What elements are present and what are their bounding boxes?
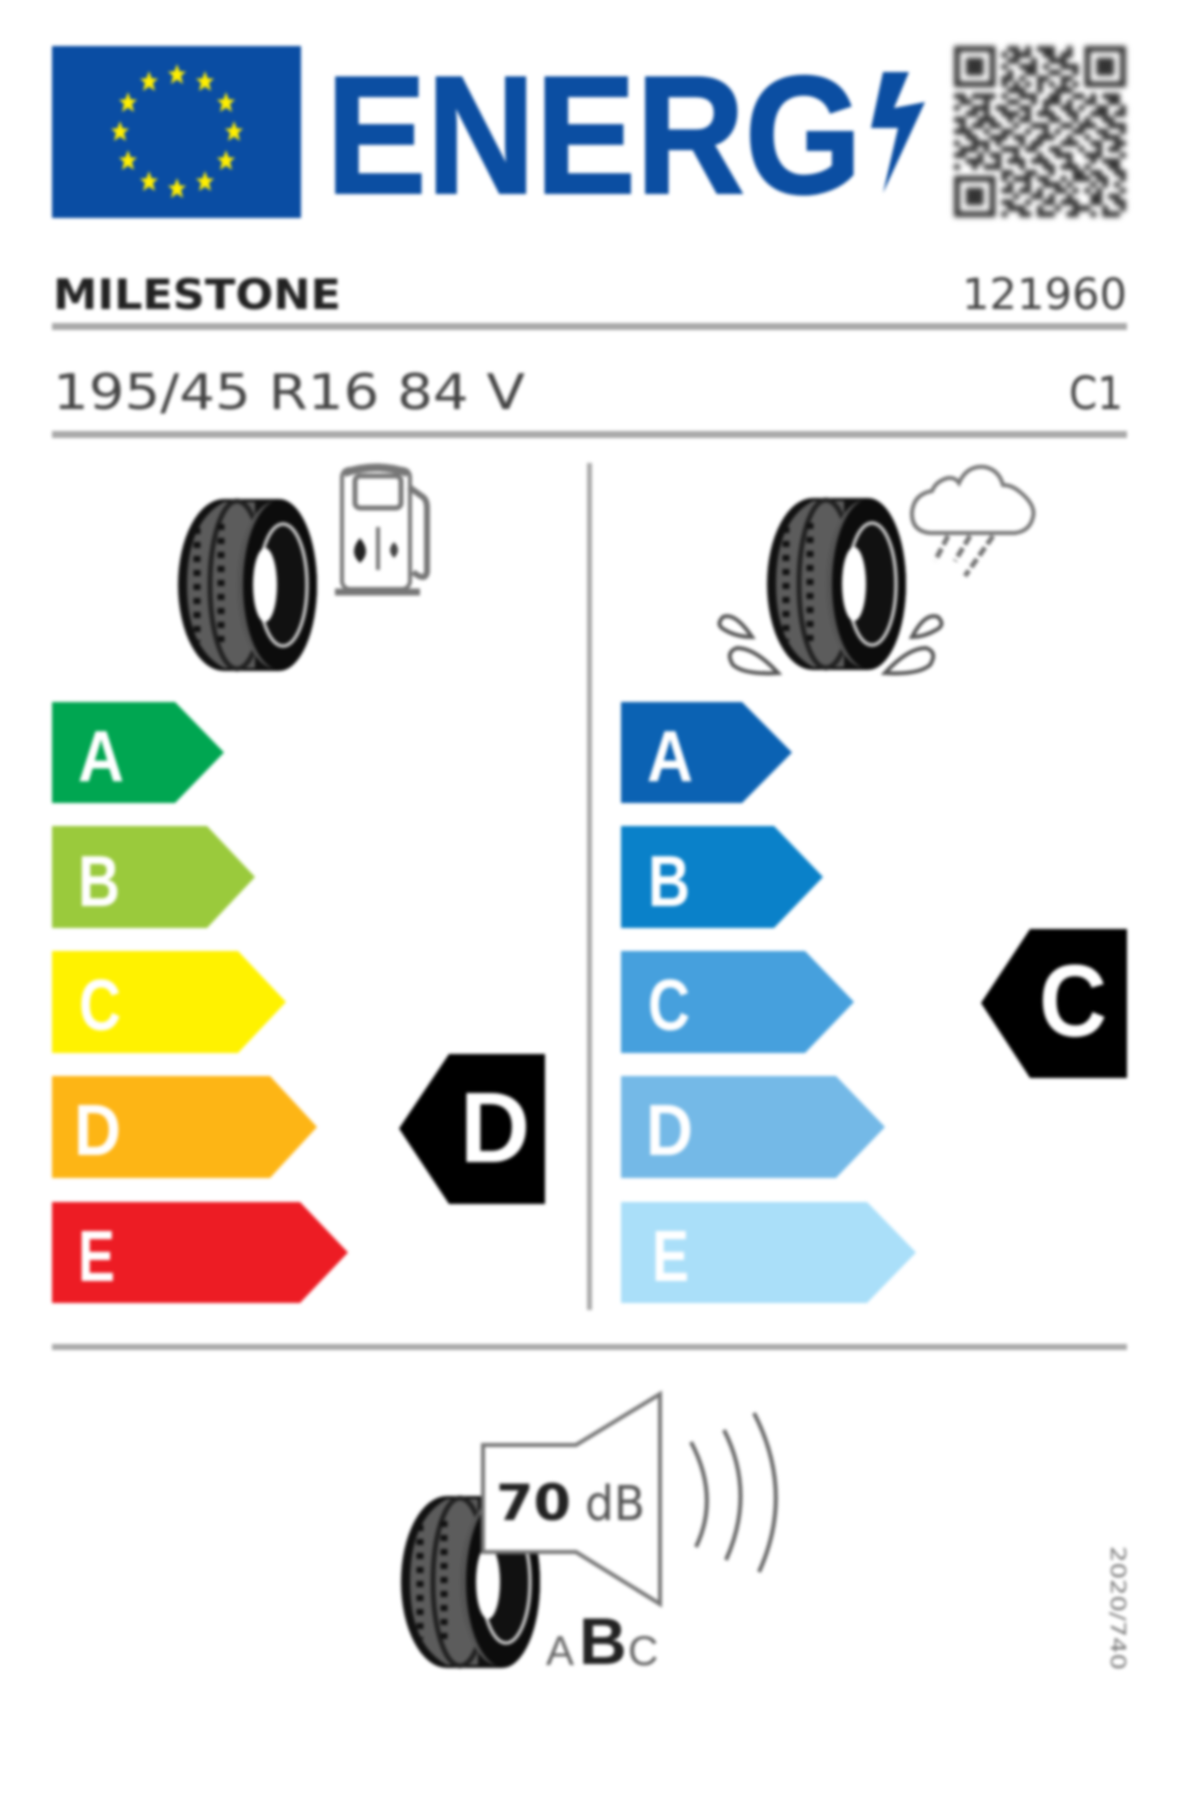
wet grip rating marker C [981, 929, 1127, 1078]
tyre type identifier: 121960 [962, 270, 1127, 320]
fuel rating marker D: D [460, 1072, 530, 1184]
icon: fuel pump [335, 468, 427, 592]
class C arrow: C [79, 966, 121, 1046]
letter B: B [579, 1604, 627, 1678]
EU flag [52, 46, 301, 218]
fuel rating marker D [399, 1054, 545, 1204]
wet grip rating marker C: C [1039, 944, 1107, 1058]
class E arrow: E [652, 1217, 689, 1297]
class E arrow [52, 1202, 348, 1303]
class D arrow: D [646, 1091, 693, 1171]
letter C: C [628, 1627, 658, 1674]
class C arrow [52, 951, 286, 1053]
class E arrow: E [78, 1217, 115, 1297]
class B arrow: B [648, 842, 690, 922]
noise class letters [546, 1604, 658, 1678]
class B arrow [621, 826, 823, 928]
noise unit: dB [585, 1476, 645, 1532]
tyre class: C1 [1069, 367, 1123, 420]
icon: fuel efficiency tyre [178, 499, 317, 671]
divider line 1 [52, 323, 1127, 330]
noise value: 70 [496, 1474, 571, 1532]
icon: rain cloud [912, 467, 1033, 576]
icon: sound waves [691, 1413, 776, 1572]
vertical divider [587, 463, 592, 1310]
letter A: A [546, 1627, 574, 1674]
icon: lightning bolt [871, 72, 925, 193]
divider line 2 [52, 431, 1127, 438]
class A arrow [621, 702, 792, 803]
class C arrow: C [648, 966, 690, 1046]
title: ENERG wordmark: ENERG [326, 41, 862, 229]
icon: wet grip tyre [767, 498, 906, 670]
class D arrow [52, 1076, 317, 1178]
tyre size: 195/45 R16 84 V [53, 364, 526, 421]
icon: noise tyre [401, 1496, 540, 1668]
class C arrow [621, 951, 854, 1053]
class D arrow [621, 1076, 885, 1178]
class B arrow: B [78, 842, 120, 922]
icon: water splashes [719, 616, 942, 673]
regulation reference: 2020/740 [1106, 1546, 1130, 1670]
class A arrow: A [647, 717, 693, 797]
rating scale: wet grip [621, 702, 916, 1303]
class B arrow [52, 826, 255, 928]
class E arrow [621, 1202, 916, 1303]
QR code [954, 49, 1126, 214]
class D arrow: D [74, 1091, 121, 1171]
supplier name: MILESTONE [53, 270, 341, 319]
rating scale: fuel efficiency [52, 702, 348, 1303]
divider line 3 [52, 1344, 1127, 1350]
icon: speaker with noise value [483, 1394, 662, 1604]
class A arrow [52, 702, 224, 803]
class A arrow: A [78, 717, 124, 797]
